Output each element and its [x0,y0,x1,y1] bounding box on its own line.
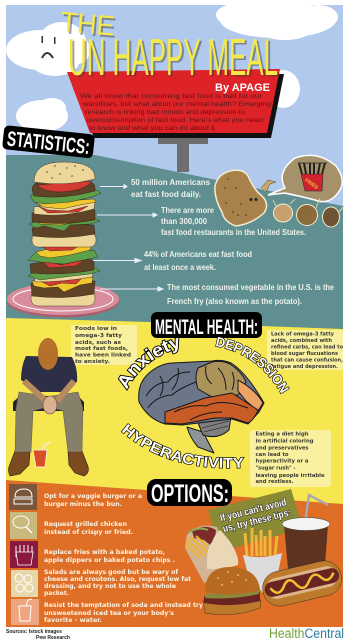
teal statistics panel [6,155,343,330]
mental health heading: MENTAL HEALTH: [155,316,258,339]
note: anxiety: Foods low in [75,326,117,332]
folds [146,366,248,420]
note: hyperactivity [250,430,331,487]
options text: unsweetened iced tea or your body's [44,610,174,617]
options text: dressing, and try not to use the whole [44,583,176,590]
options text: Replace fries with a baked potato, [44,549,165,556]
options text: instead of crispy or fried. [44,529,133,536]
boots [8,451,88,476]
sky background [6,5,343,210]
note: anxiety [71,325,137,365]
options text: favorite - water. [44,617,102,624]
tips sign [208,489,303,552]
note: depression: Lack of omega-3 fatty [271,332,334,338]
orange lobe [165,393,258,424]
note: depression: refined carbs, can lead to [271,344,343,350]
tan lobe [196,361,246,397]
plate [7,283,119,318]
note: hyperactivity: and preservatives [256,446,309,452]
head [38,338,58,370]
note: depression: that can cause confusion, [271,358,343,364]
statistics heading [2,125,95,160]
intro text [80,94,271,132]
big potato [215,170,276,226]
statistics text: French fry (also known as the potato). [167,296,302,306]
statistics heading: STATISTICS: [6,128,91,159]
torso [21,356,77,392]
icon: chicken [10,512,37,539]
intro text: research is linking bad moods and depression to [85,110,246,116]
sign [67,69,284,138]
statistics text: eat fast food daily. [131,189,201,199]
note: hyperactivity: "sugar rush" - [256,466,296,472]
options text: packet. [44,590,69,597]
food illustration [185,495,345,615]
sign post [158,132,208,172]
title: THE [61,8,118,44]
options text: Resist the temptation of soda and instead try [44,602,203,609]
fries box [243,528,282,593]
statistics text: fast food restaurants in the United States. [161,227,306,237]
word: anxiety: Anxiety [118,338,180,391]
brain stem [187,427,214,453]
orange options panel [6,480,343,627]
statistics text: 44% of Americans eat fast food [144,249,252,259]
arrows [93,184,163,291]
note: anxiety: have been linked [75,352,131,358]
wrap and fries [185,526,238,583]
note: anxiety: most fast foods, [75,346,128,352]
intro text: waistlines, but what about our mental health? Emerging [82,102,271,108]
hands [43,396,57,414]
clouds [6,2,338,132]
options text: Opt for a veggie burger or a [44,493,142,500]
word: depression: DEPRESSION [215,337,290,394]
options text: apple dippers or baked potato chips . [44,557,175,564]
statistics text: at least once a week. [144,262,216,272]
options text: Salads are always good but be wary of [44,569,178,576]
soda cup [33,442,50,467]
note: anxiety: acids, such as [75,340,122,346]
mental health heading [151,312,262,339]
statistics text [131,177,334,306]
note: hyperactivity: hyperactivity or a [256,458,309,464]
bench [13,396,84,411]
cerebellum [198,416,231,437]
title: THE [59,6,116,42]
arms [24,381,74,401]
options text: burger minus the bun. [44,501,122,508]
options heading [147,479,232,508]
note: depression: acids, combined with [271,338,332,344]
byline: By APAGE [215,82,270,94]
note: hyperactivity: Eating a diet high [256,432,309,438]
note: hyperactivity: in artificial coloring [256,438,314,444]
peach lobe [238,380,263,411]
small potatoes [273,198,344,227]
icon: drink [11,599,39,625]
sad man [8,338,88,476]
options heading: OPTIONS: [151,480,229,508]
icon: salad [11,570,38,597]
tips sign: us, try these tips: [222,507,292,535]
intro text: to know and what you can do about it. [89,126,217,132]
options text [44,493,203,624]
note: depression: fatigue and depression. [271,364,338,370]
hot dog [259,557,345,610]
note: anxiety: to anxiety. [75,359,110,365]
options text: Request grilled chicken [44,521,127,528]
cloud sad face [42,36,56,58]
intro text: overconsumption of fast food. Here's what you need [87,118,263,124]
tips sign: If you can't avoid [219,497,288,524]
speech bubble with fries: FRIES [304,178,320,191]
note: depression [267,330,343,370]
intro text: We all know that consuming fast food is bad for our [80,94,262,100]
title [59,6,280,89]
sources: Sources: Istock images [6,629,62,635]
statistics text: than 300,000 [161,216,207,226]
legs [15,392,83,452]
statistics text: There are more [161,205,214,215]
note: hyperactivity: and restless. [256,479,294,485]
note: anxiety: omega-3 fatty [75,333,122,339]
note: hyperactivity: can lead to [256,452,289,458]
icon: veggie burger [9,484,37,510]
potato family [215,155,344,227]
burger [28,161,101,306]
statistics text: 50 million Americans [131,177,210,187]
yellow mental health panel [6,318,343,506]
options text: cheese and croutons. Also, request low fat [44,576,191,583]
word: hyperactivity: HYPERACTIVITY [120,423,245,469]
icon: fries [10,541,38,568]
sources [6,629,70,640]
note: depression: blood sugar flucuations [271,351,339,357]
note: hyperactivity: leaving people irritable [256,473,325,479]
soft drink [282,495,330,569]
brain [139,360,264,453]
brain silhouette and gray lobe [139,360,264,425]
burger [203,567,261,615]
